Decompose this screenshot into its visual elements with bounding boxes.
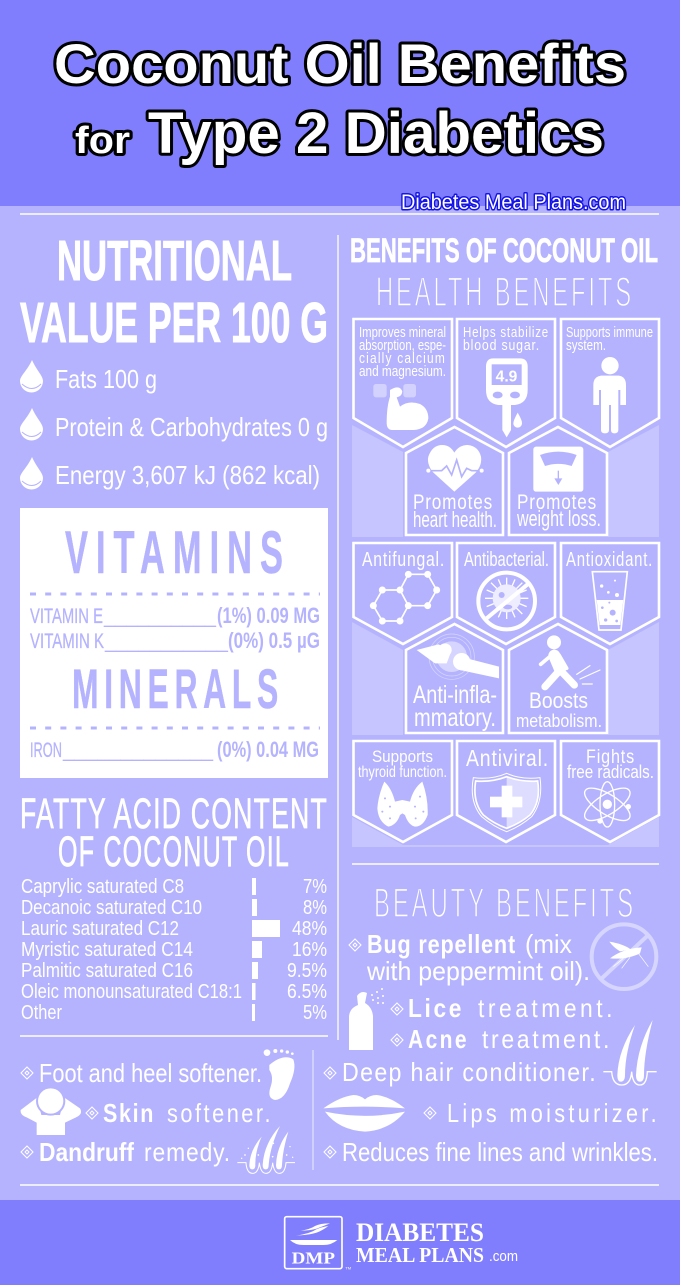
- panel: mineral absorption: Improves mineral: [359, 324, 446, 341]
- title: [54, 32, 626, 166]
- row: vitamin K: (0%) 0.5 µG: [228, 628, 320, 653]
- icon: diamond bullet: [21, 1067, 33, 1079]
- title: Coconut Oil Benefits: [54, 32, 626, 95]
- panel: thyroid: thyroid function.: [358, 764, 447, 781]
- nutrition list: [20, 360, 328, 490]
- logo wordmark: MEAL PLANS: [356, 1243, 484, 1267]
- panel: anti-inflammatory: mmatory.: [414, 704, 496, 732]
- icon: glass: [592, 572, 627, 630]
- row: vitamin E: __________: [103, 605, 216, 628]
- icon: joint: [417, 634, 499, 679]
- light band 1: [352, 425, 659, 537]
- panel: heart health: Promotes: [413, 491, 493, 514]
- panel: antiviral: [457, 741, 555, 842]
- panel: antifungal: Antifungal.: [362, 549, 445, 571]
- panel: weight loss: [509, 427, 607, 535]
- main panel: [0, 206, 680, 1200]
- icon: no bacteria: [478, 573, 535, 629]
- logo wordmark: [356, 1218, 518, 1267]
- heading: minerals: MINERALS: [72, 657, 284, 720]
- text: lice treatment: [408, 993, 616, 1023]
- icon: scale: [533, 447, 583, 492]
- text: bug repellent: [366, 929, 590, 986]
- trademark: TM: [345, 1265, 351, 1270]
- text: lice treatment: Lice: [408, 993, 464, 1023]
- row: vitamin K: ___________: [104, 630, 228, 653]
- panel: free radicals: [561, 741, 659, 842]
- light band 2: [352, 622, 659, 735]
- heading: fatty acid content: FATTY ACID CONTENT: [20, 790, 328, 838]
- panel: heart health: heart health.: [413, 507, 497, 532]
- icon: diamond bullet: [324, 1146, 336, 1158]
- text: skin softener: softener.: [167, 1098, 273, 1128]
- panel: anti-inflammatory: [406, 624, 503, 733]
- chart: fatty acids: Oleic monounsaturated C18:1: [21, 981, 242, 1003]
- icon: dandruff hair: [237, 1126, 295, 1173]
- icon: spray can: [349, 988, 384, 1050]
- chart: fatty acids: 5%: [303, 1002, 327, 1024]
- text: acne treatment: Acne: [408, 1024, 469, 1054]
- text: dandruff remedy: Dandruff: [39, 1137, 134, 1167]
- text: foot softener: Foot and heel softener.: [39, 1058, 262, 1088]
- panel: mineral absorption: cially calcium: [359, 350, 446, 367]
- chart: fatty acids: 16%: [292, 939, 327, 961]
- text: deep hair conditioner: Deep hair conditioner.: [342, 1057, 597, 1087]
- text: energy: Energy 3,607 kJ (862 kcal): [55, 460, 320, 490]
- text: bug repellent: (mix: [525, 929, 572, 959]
- logo mark: DMP: [292, 1248, 335, 1267]
- icon: foot: [264, 1049, 294, 1100]
- text: protein: Protein & Carbohydrates 0 g: [55, 412, 328, 442]
- logo: [285, 1217, 351, 1270]
- icon: heart: [426, 445, 484, 492]
- icon: atom: [580, 782, 635, 827]
- panel: free radicals: Fights: [586, 747, 635, 768]
- heading: nutritional value: NUTRITIONAL: [57, 229, 292, 293]
- icon: flexed arm: [373, 384, 428, 430]
- panel: vitamins and minerals: [20, 508, 328, 778]
- panel: anti-inflammatory: Anti-infla-: [413, 681, 497, 709]
- text: acne treatment: [408, 1024, 612, 1054]
- row: vitamin K: VITAMIN K: [30, 630, 104, 653]
- panel: immune system: [561, 319, 659, 447]
- chart: fatty acids: 8%: [303, 897, 327, 919]
- icon: relaxed person: [21, 1086, 81, 1135]
- heading: nutritional value: VALUE PER 100 G: [20, 291, 328, 355]
- row: iron: _____________: [62, 739, 213, 762]
- heading: nutritional value: [20, 229, 328, 355]
- panel: mineral absorption: and magnesium.: [359, 363, 446, 380]
- text: acne treatment: treatment.: [482, 1024, 612, 1054]
- icon: diamond bullet: [349, 939, 361, 951]
- text: dandruff remedy: [39, 1137, 231, 1167]
- panel: metabolism: Boosts: [529, 688, 588, 713]
- chart: fatty acids: [21, 876, 327, 1024]
- chart: fatty acids: Decanoic saturated C10: [21, 897, 202, 919]
- light band 3: [352, 817, 659, 847]
- icon: diamond bullet: [21, 1146, 33, 1158]
- panel: metabolism: metabolism.: [516, 711, 602, 731]
- row: iron: IRON: [30, 739, 62, 762]
- icon: diamond bullet: [324, 1067, 336, 1079]
- icon: diamond bullet: [391, 1034, 403, 1046]
- panel: antibacterial: [457, 543, 555, 644]
- panel: weight loss: Promotes: [517, 491, 597, 514]
- icon: no mosquito: [592, 924, 656, 989]
- row: iron: (0%) 0.04 MG: [217, 737, 319, 762]
- icon: diamond bullet: [86, 1107, 98, 1119]
- icon: drop: [20, 360, 43, 392]
- chart: fatty acids: 7%: [303, 876, 327, 898]
- icon: shield: [472, 773, 541, 832]
- chart: fatty acids: Lauric saturated C12: [21, 918, 179, 940]
- panel: antibacterial: Antibacterial.: [464, 549, 549, 571]
- chart: fatty acids: 6.5%: [287, 981, 327, 1003]
- text: bug repellent: with peppermint oil).: [366, 956, 590, 986]
- heading: fatty acid content: OF COCONUT OIL: [58, 828, 290, 876]
- row: vitamin E: (1%) 0.09 MG: [217, 603, 320, 628]
- title: Type 2 Diabetics: [148, 101, 604, 166]
- icon: molecule: [371, 572, 439, 624]
- panel: free radicals: free radicals.: [567, 762, 654, 782]
- icon: drop: [20, 457, 43, 490]
- panel: antioxidant: [561, 543, 659, 644]
- header band: [0, 0, 680, 206]
- site name: Diabetes Meal Plans.com: [401, 191, 626, 214]
- panel: weight loss: weight loss.: [516, 506, 601, 531]
- panel: mineral absorption: absorption, espe-: [359, 337, 446, 354]
- panel: blood sugar: blood sugar.: [463, 337, 540, 354]
- text: fats: Fats 100 g: [55, 364, 157, 394]
- panel: mineral absorption: [354, 319, 452, 447]
- panel: blood sugar: Helps stabilize: [463, 324, 549, 341]
- icon: person: [593, 357, 626, 433]
- logo wordmark: DIABETES: [356, 1218, 484, 1247]
- panel: heart health: [406, 427, 503, 535]
- icon: hair: [603, 1020, 657, 1085]
- text: lice treatment: treatment.: [478, 993, 616, 1023]
- chart: fatty acids: Caprylic saturated C8: [21, 876, 184, 898]
- icon: diamond bullet: [391, 1003, 403, 1015]
- heading: fatty acid content: [20, 790, 328, 876]
- row: vitamin E: [30, 603, 320, 628]
- text: skin softener: Skin: [103, 1098, 155, 1128]
- icon: walker: [541, 635, 600, 687]
- text: bug repellent: Bug repellent: [367, 929, 516, 959]
- chart: fatty acids: 9.5%: [287, 960, 327, 982]
- icon: glucose meter: 4.9: [496, 369, 517, 386]
- chart: fatty acids: Other: [21, 1002, 62, 1024]
- panel: thyroid: Supports: [372, 747, 433, 766]
- chart: fatty acids: Myristic saturated C14: [21, 939, 193, 961]
- row: iron: [30, 737, 319, 762]
- chart: fatty acids: 48%: [292, 918, 327, 940]
- text: skin softener: [103, 1098, 273, 1128]
- panel: immune system: system.: [566, 337, 606, 354]
- heading: vitamins: VITAMINS: [65, 519, 291, 586]
- icon: drop: [20, 408, 43, 440]
- icon: diamond bullet: [424, 1107, 436, 1119]
- icon: thyroid: [377, 782, 428, 827]
- icon: lips: [323, 1095, 405, 1132]
- row: vitamin K: [30, 628, 320, 653]
- panel: thyroid: [354, 741, 452, 842]
- panel: antiviral: Antiviral.: [466, 745, 549, 771]
- panel: blood sugar: [457, 319, 555, 447]
- panel: antifungal: [354, 543, 452, 644]
- logo wordmark: .com: [489, 1248, 518, 1265]
- panel: metabolism: [509, 624, 607, 733]
- footer band: [0, 1200, 680, 1285]
- row: vitamin E: VITAMIN E: [30, 605, 103, 628]
- title: for: [75, 120, 130, 162]
- panel: antioxidant: Antioxidant.: [566, 549, 653, 571]
- text: dandruff remedy: remedy.: [144, 1137, 231, 1167]
- chart: fatty acids: Palmitic saturated C16: [21, 960, 193, 982]
